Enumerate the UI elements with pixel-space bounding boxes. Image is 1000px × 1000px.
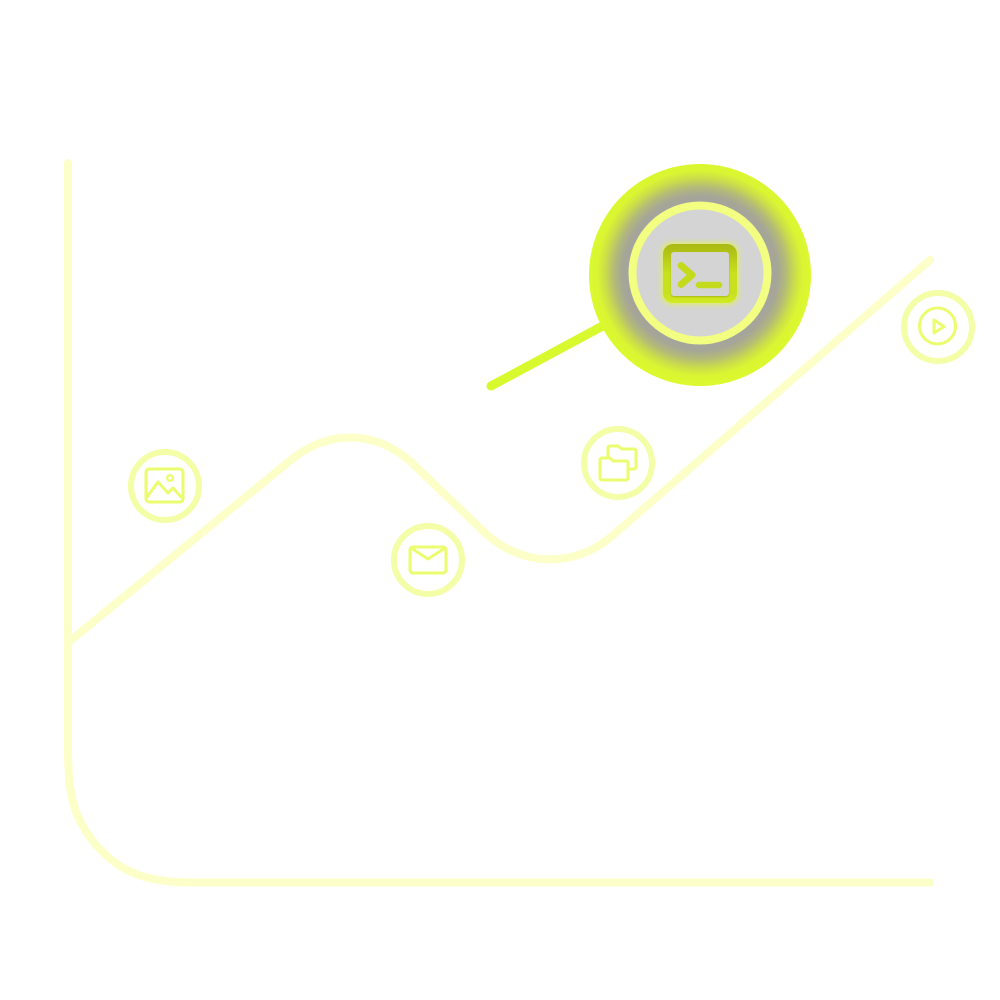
magnifier halo	[589, 164, 811, 386]
trend line	[70, 260, 930, 641]
magnifier lens	[632, 206, 768, 340]
magnifier: terminal highlight	[589, 164, 811, 386]
terminal prompt	[681, 266, 692, 284]
icon badge: mail	[394, 526, 462, 594]
chart axes	[68, 163, 930, 882]
magnifier handle	[491, 322, 610, 386]
icon badge: play	[904, 293, 972, 361]
icon badge: folders	[584, 429, 652, 497]
terminal cursor	[699, 282, 719, 288]
icon: terminal	[661, 242, 739, 305]
icon badge: image	[131, 452, 199, 520]
